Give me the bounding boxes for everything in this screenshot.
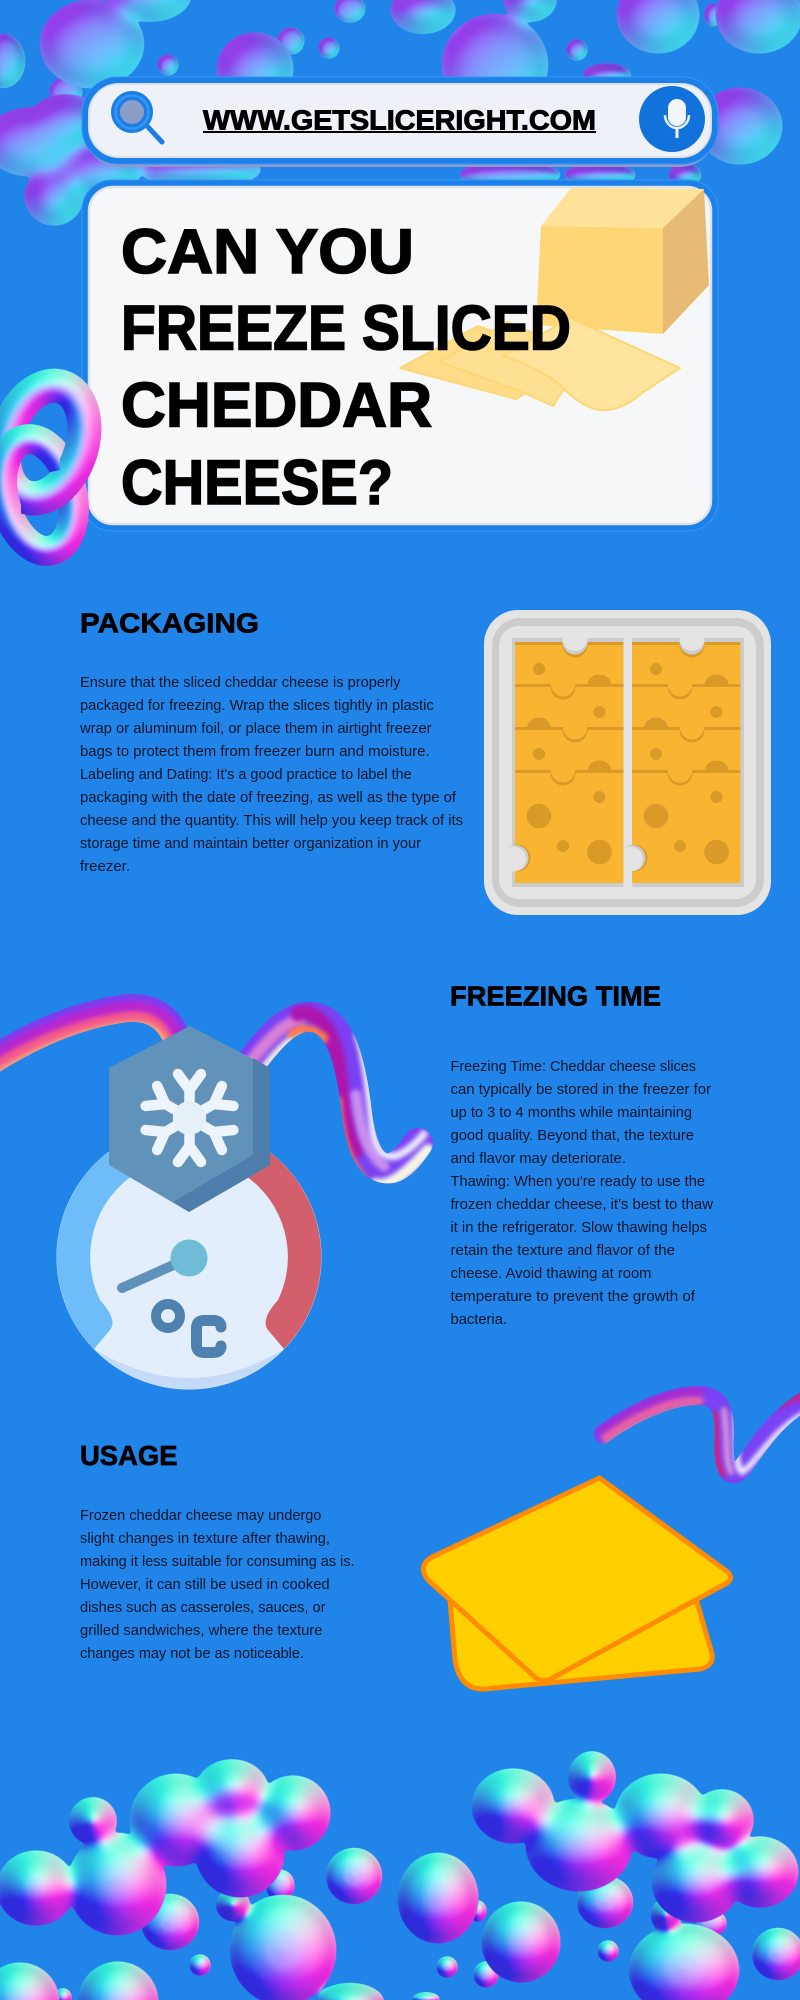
heading: packaging: PACKAGING — [80, 608, 259, 638]
title text: FREEZE SLICED — [121, 294, 571, 364]
paragraph: usage: changes may not be as noticeable. — [80, 1645, 304, 1662]
paragraph: freezing and thawing: can typically be stored in the freezer for — [450, 1081, 711, 1098]
paragraph: packaging: bags to protect them from freezer burn and moisture. — [80, 743, 430, 760]
paragraph: packaging: Ensure that the sliced cheddar cheese is properly — [80, 674, 401, 691]
heading: freezing time: FREEZING TIME — [450, 980, 661, 1012]
back slice — [450, 1600, 712, 1689]
paragraph: usage: making it less suitable for consuming as is. — [80, 1553, 355, 1570]
icon: snowflake hexagon — [109, 1026, 270, 1212]
cheese slice: left — [501, 626, 624, 883]
upper ring overlap — [21, 425, 102, 516]
decoration: ribbon above usage slices — [594, 1386, 800, 1484]
gauge bottom crescent — [94, 1349, 284, 1389]
cheese slice: right — [618, 626, 740, 883]
lower ring — [0, 431, 85, 559]
decoration: ribbon left of thermometer — [0, 994, 187, 1072]
icon: microphone button — [639, 86, 705, 152]
section: packaging text — [79, 608, 463, 875]
paragraph: freezing and thawing: good quality. Beyond that, the texture — [450, 1127, 694, 1144]
large bubbles — [0, 1854, 738, 2000]
paragraph: freezing and thawing: and flavor may deteriorate. — [450, 1150, 626, 1167]
title text: CAN YOU — [121, 217, 414, 287]
gauge needle — [122, 1240, 208, 1288]
decoration: ribbon right of thermometer — [240, 1002, 433, 1184]
paragraph: usage: Frozen cheddar cheese may undergo — [80, 1507, 321, 1524]
paragraph: freezing and thawing: it in the refrigerator. Slow thawing helps — [450, 1219, 707, 1236]
icon: magnifier — [116, 96, 162, 142]
small bubbles — [55, 1870, 726, 2000]
section: freezing time text — [450, 980, 713, 1328]
paragraph: packaging: cheese and the quantity. This will help you keep track of its — [80, 812, 463, 829]
paragraph: freezing and thawing: temperature to prevent the growth of — [450, 1288, 696, 1305]
title text: CHEESE? — [121, 448, 393, 518]
paragraph: freezing and thawing: retain the texture and flavor of the — [450, 1242, 675, 1259]
search bar — [82, 77, 718, 167]
paragraph: usage: grilled sandwiches, where the texture — [80, 1622, 322, 1639]
paragraph: usage — [80, 1507, 355, 1662]
heading: usage: USAGE — [80, 1440, 178, 1471]
paragraph: freezing and thawing: bacteria. — [450, 1311, 507, 1328]
paragraph: usage: dishes such as casseroles, sauces, or — [80, 1599, 326, 1616]
paragraph: packaging: wrap or aluminum foil, or place them in airtight freezer — [79, 720, 432, 737]
paragraph: freezing and thawing: frozen cheddar cheese, it's best to thaw — [450, 1196, 713, 1213]
gauge unit: degrees Celsius symbol — [156, 1304, 221, 1352]
illustration: cheese slices in tray — [484, 610, 771, 915]
upper ring — [0, 375, 98, 509]
gauge cold arc — [57, 1144, 135, 1349]
bottom blob decoration — [0, 1753, 800, 2000]
paragraph: packaging: packaging with the date of freezing, as well as the type of — [80, 789, 457, 806]
paragraph: packaging: packaged for freezing. Wrap the slices tightly in plastic — [80, 697, 434, 714]
illustration: thermometer gauge — [56, 1124, 322, 1390]
title text: CHEDDAR — [121, 370, 432, 440]
title text — [121, 217, 571, 518]
paragraph: freezing and thawing — [450, 1058, 713, 1328]
paragraph: freezing and thawing: Thawing: When you're ready to use the — [450, 1173, 705, 1190]
top blob decoration — [0, 0, 800, 224]
blob clusters — [0, 1753, 797, 1934]
front slice — [423, 1478, 731, 1681]
paragraph: usage: However, it can still be used in cooked — [80, 1576, 330, 1593]
paragraph: packaging: freezer. — [80, 858, 130, 875]
illustration: cheese block and slices — [400, 188, 709, 410]
section: usage text — [80, 1440, 355, 1662]
paragraph: packaging: storage time and maintain better organization in your — [80, 835, 421, 852]
decoration: 3D interlocked rings — [0, 375, 98, 559]
paragraph: packaging: Labeling and Dating: It's a good practice to label the — [80, 766, 412, 783]
illustration: two yellow cheese slices — [423, 1478, 731, 1689]
paragraph: freezing and thawing: cheese. Avoid thawing at room — [450, 1265, 652, 1282]
gauge hot arc — [243, 1144, 321, 1349]
title card — [82, 180, 718, 531]
paragraph: freezing and thawing: Freezing Time: Cheddar cheese slices — [450, 1058, 696, 1075]
medium bubbles — [142, 1849, 800, 1979]
snowflake — [146, 1074, 233, 1162]
paragraph: packaging — [79, 674, 463, 875]
paragraph: freezing and thawing: up to 3 to 4 months while maintaining — [450, 1104, 692, 1121]
paragraph: usage: slight changes in texture after thawing, — [80, 1530, 330, 1547]
url text: WWW.GETSLICERIGHT.COM — [203, 104, 596, 136]
